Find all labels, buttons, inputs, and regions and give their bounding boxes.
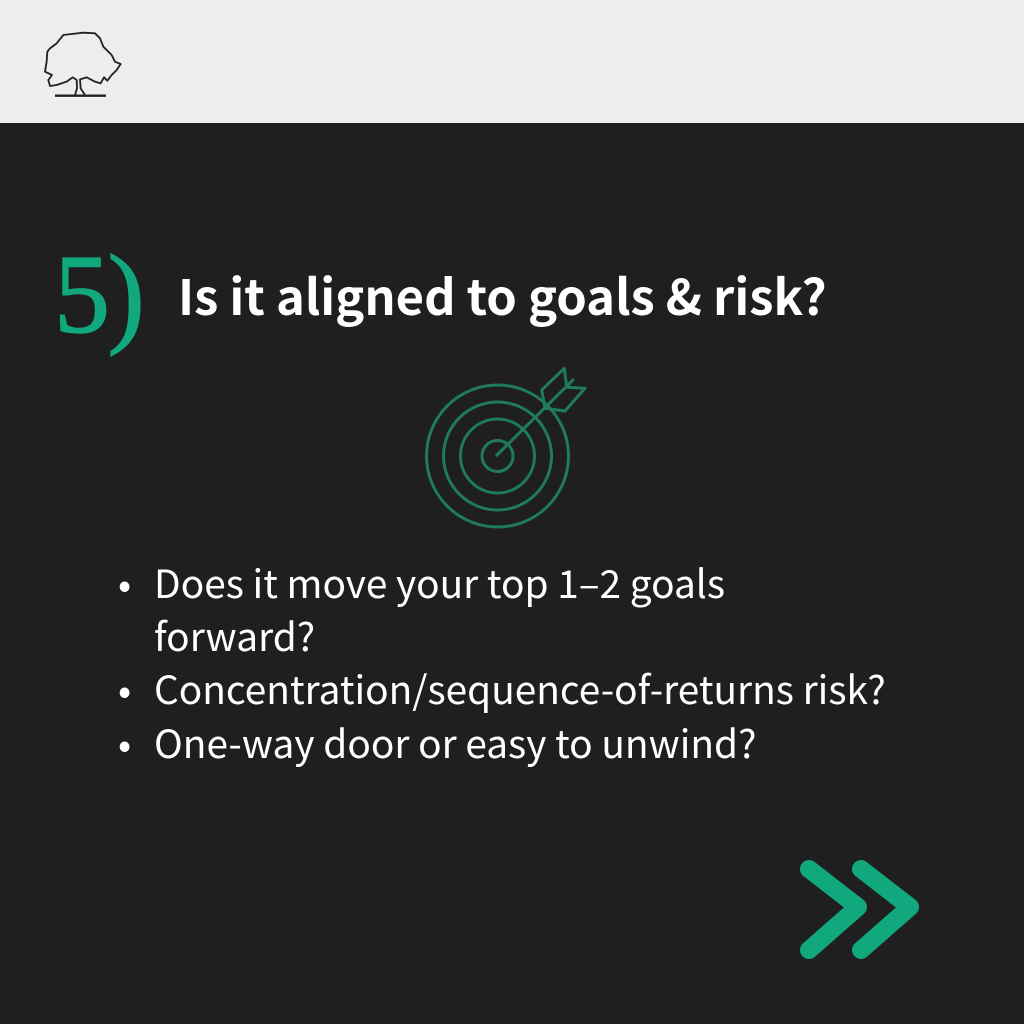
bullet list <box>118 554 886 770</box>
icon: target with arrow <box>425 366 586 528</box>
icon: tree logo <box>44 32 122 97</box>
header band <box>0 0 1024 123</box>
bullet list: Does it move your top 1–2 goals <box>154 554 725 610</box>
bullet list: • <box>118 554 131 610</box>
bullet 1 <box>118 554 725 610</box>
icon: double chevron arrow <box>800 860 919 959</box>
bullet 1 continuation: forward? <box>154 607 315 663</box>
bullet list: Concentration/sequence-of-returns risk? <box>154 660 886 716</box>
number 5): 5) <box>54 233 142 357</box>
bullet list: • <box>118 714 131 770</box>
bullet list: One-way door or easy to unwind? <box>154 714 756 770</box>
bullet 3 <box>118 714 756 770</box>
heading: Is it aligned to goals & risk? <box>178 259 827 330</box>
bullet 2 <box>118 660 886 716</box>
bullet list: • <box>118 660 131 716</box>
